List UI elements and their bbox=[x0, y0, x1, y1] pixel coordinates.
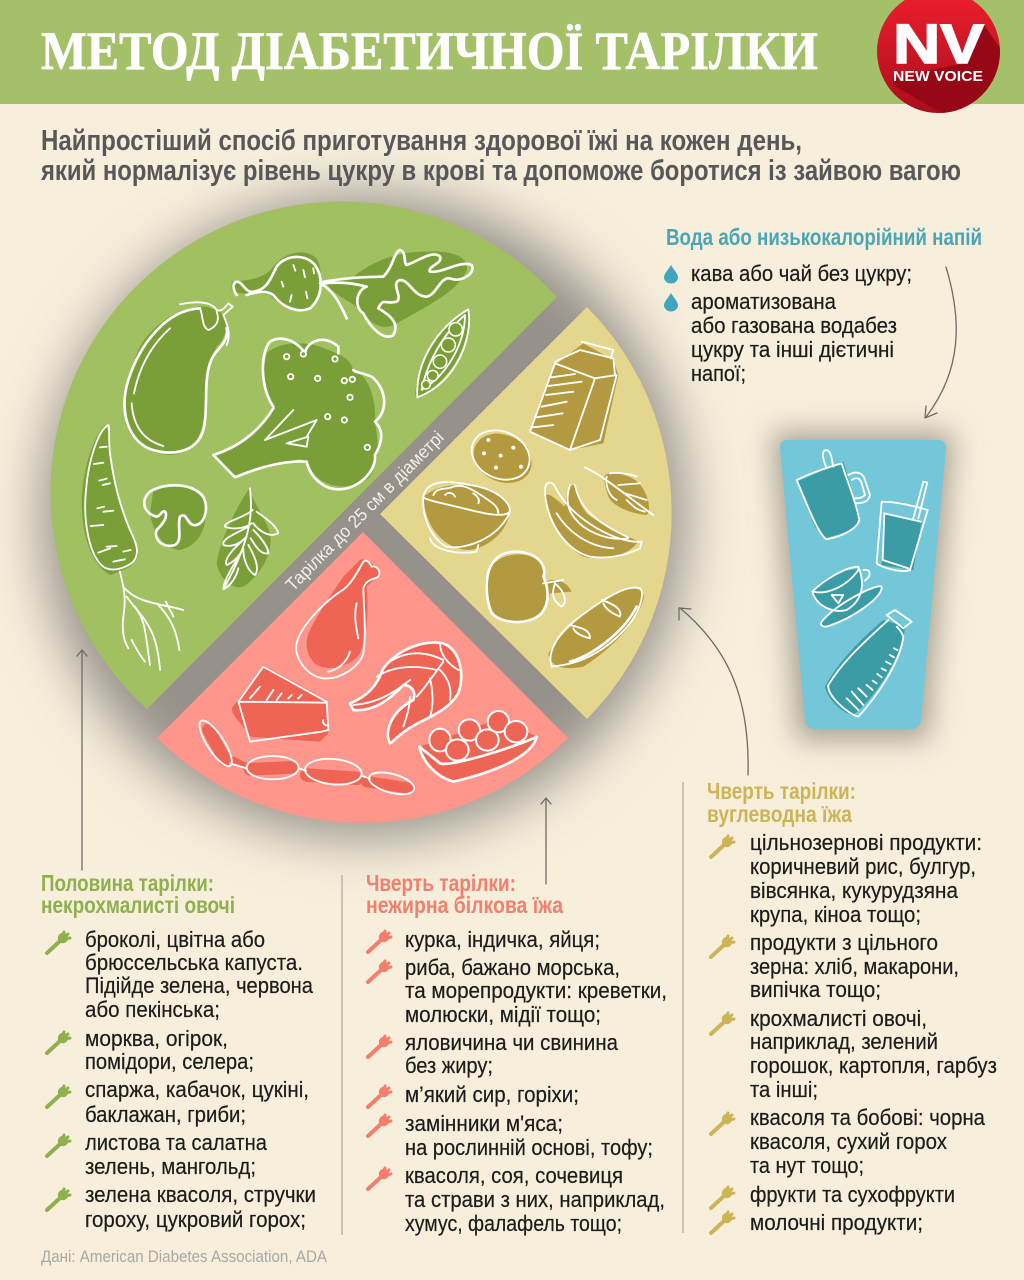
icon: beet leaf bbox=[320, 250, 473, 337]
heading: quarter plate carbs: Чверть тарілки: bbox=[707, 778, 856, 804]
icon: pea pod bbox=[415, 309, 469, 397]
divider left bbox=[341, 875, 343, 1235]
icon: eggplant bbox=[125, 302, 233, 455]
list item: meat substitutes bbox=[368, 1111, 653, 1160]
panel: water or low-calorie drink bbox=[664, 224, 982, 386]
list item: legumes bbox=[711, 1105, 986, 1178]
icon: leaf bbox=[217, 488, 278, 589]
heading: quarter plate protein bbox=[366, 870, 563, 918]
list item: green beans: зелена квасоля, стручки bbox=[85, 1182, 316, 1207]
glass with drinks bbox=[780, 440, 946, 729]
icon: bread loaf bbox=[548, 587, 644, 668]
list item: beans bbox=[368, 1163, 665, 1236]
panel: carbohydrates list bbox=[707, 778, 997, 1235]
list item: beans: квасоля, соя, сочевиця bbox=[405, 1163, 623, 1188]
logo: NV New Voice bbox=[877, 0, 1005, 118]
heading: quarter plate carbs bbox=[707, 778, 856, 827]
arrow: carbs label to plate bbox=[679, 608, 748, 775]
heading: quarter plate protein: нежирна білкова їжа bbox=[366, 892, 563, 918]
list item: broccoli: брюссельська капуста. bbox=[85, 950, 303, 975]
plate: quarter, carbohydrates bbox=[380, 307, 672, 719]
list item: beef bbox=[368, 1030, 619, 1078]
list item: asparagus: спаржа, кабачок, цукіні, bbox=[85, 1077, 309, 1102]
icon: potato bbox=[464, 421, 540, 492]
icon: teacup bbox=[812, 567, 882, 627]
panel: protein list bbox=[366, 870, 667, 1236]
logo: NV New Voice: NV bbox=[893, 12, 984, 75]
list item: poultry: курка, індичка, яйця; bbox=[405, 927, 600, 952]
icon: mushroom bbox=[144, 485, 206, 550]
list item: meat substitutes: замінники м'яса; bbox=[405, 1111, 563, 1136]
icon: water bottle bbox=[825, 610, 912, 717]
icon: grain bowl bbox=[423, 482, 510, 553]
list item: whole grain products: продукти з цільного bbox=[750, 930, 938, 955]
list item: whole grain products: зерна: хліб, макарони, bbox=[750, 954, 959, 979]
list item: flavoured water: або газована водабез bbox=[691, 313, 897, 338]
list item: carrot bbox=[47, 1026, 254, 1074]
arrow: drinks to glass bbox=[925, 267, 956, 418]
list item: fish: риба, бажано морська, bbox=[405, 955, 620, 980]
title: МЕТОД ДІАБЕТИЧНОЇ ТАРІЛКИ bbox=[41, 21, 818, 81]
plate shadow bbox=[42, 194, 686, 838]
list item: fruit: фрукти та сухофрукти bbox=[750, 1182, 955, 1207]
icon: broccoli bbox=[213, 339, 384, 489]
list item: fish bbox=[368, 955, 667, 1027]
list item: flavoured water bbox=[664, 289, 897, 386]
list item: legumes: квасоля, сухий горох bbox=[750, 1129, 947, 1154]
list item: leafy greens bbox=[47, 1130, 268, 1179]
list item: fish: молюски, мідії тощо; bbox=[405, 1002, 601, 1027]
plate: quarter, lean protein bbox=[157, 532, 568, 823]
list item: carrot: морква, огірок, bbox=[85, 1026, 228, 1051]
list item: leafy greens: зелень, мангольд; bbox=[85, 1154, 256, 1179]
subtitle bbox=[40, 125, 961, 187]
list item: flavoured water: ароматизована bbox=[691, 289, 837, 314]
list item: beans: хумус, фалафель тощо; bbox=[405, 1211, 622, 1236]
list item: asparagus bbox=[47, 1077, 309, 1127]
arrow: protein label to plate bbox=[541, 798, 551, 884]
icon: salmon steak bbox=[350, 643, 461, 743]
logo: NV New Voice: NEW VOICE bbox=[893, 68, 983, 85]
list item: broccoli bbox=[47, 927, 314, 1022]
subtitle: Найпростіший спосіб приготування здорової їжі на кожен день, bbox=[41, 125, 802, 157]
icon: carrot bbox=[82, 425, 183, 670]
list item: whole grains: вівсянка, кукурудзяна bbox=[750, 878, 959, 903]
icon: sausages bbox=[194, 716, 417, 798]
list item: flavoured water: напої; bbox=[691, 361, 746, 386]
icon: bananas bbox=[545, 483, 642, 559]
list item: legumes: та нут тощо; bbox=[750, 1153, 864, 1178]
list item: green beans bbox=[47, 1182, 316, 1232]
list item: carrot: помідори, селера; bbox=[85, 1049, 254, 1074]
list item: starchy vegetables: горошок, картопля, гарбуз bbox=[750, 1053, 997, 1078]
icon: wheat leaf bbox=[585, 468, 653, 515]
divider right bbox=[682, 782, 684, 1233]
icon: cheese bbox=[232, 665, 328, 742]
list item: broccoli: броколі, цвітна або bbox=[85, 927, 265, 952]
list item: starchy vegetables bbox=[711, 1006, 997, 1102]
list item: whole grains: коричневий рис, булгур, bbox=[750, 854, 976, 879]
list item: broccoli: Підійде зелена, червона bbox=[85, 973, 314, 998]
list item: beef: яловичина чи свинина bbox=[405, 1030, 619, 1055]
heading: quarter plate protein: Чверть тарілки: bbox=[366, 870, 516, 896]
list item: soft cheese: м’який сир, горіхи; bbox=[405, 1082, 579, 1107]
panel: vegetables list bbox=[41, 870, 316, 1232]
list item: broccoli: або пекінська; bbox=[85, 997, 220, 1022]
list item: whole grain products: випічка тощо; bbox=[750, 977, 881, 1002]
heading: half plate: некрохмалисті овочі bbox=[41, 892, 235, 918]
plate: half, non-starchy vegetables bbox=[50, 202, 557, 709]
icon: milk carton bbox=[530, 342, 618, 450]
list item: green beans: гороху, цукровий горох; bbox=[85, 1207, 306, 1232]
list item: whole grains bbox=[711, 830, 982, 927]
heading: half plate bbox=[41, 870, 235, 918]
list item: coffee or tea: кава або чай без цукру; bbox=[691, 261, 912, 286]
list item: starchy vegetables: крохмалисті овочі, bbox=[750, 1006, 927, 1031]
list item: dairy: молочні продукти; bbox=[750, 1210, 923, 1235]
icon: drinking glass bbox=[877, 482, 928, 571]
heading: quarter plate carbs: вуглеводна їжа bbox=[707, 801, 852, 827]
header band bbox=[0, 0, 1024, 104]
source: Дані: American Diabetes Association, ADA bbox=[41, 1247, 328, 1266]
plate diameter label: Тарілка до 25 см в діаметрі bbox=[282, 427, 448, 595]
list item: leafy greens: листова та салатна bbox=[85, 1130, 268, 1155]
list item: whole grain products bbox=[711, 930, 959, 1002]
icon: mug bbox=[797, 450, 870, 539]
list item: starchy vegetables: та інші; bbox=[750, 1077, 818, 1102]
list item: whole grains: крупа, кіноа тощо; bbox=[750, 902, 921, 927]
icon: chicken leg bbox=[296, 559, 380, 678]
list item: beans: та страви з них, наприклад, bbox=[405, 1187, 665, 1212]
list item: starchy vegetables: наприклад, зелений bbox=[750, 1029, 938, 1054]
list item: meat substitutes: на рослинній основі, тофу; bbox=[405, 1135, 653, 1160]
heading: half plate: Половина тарілки: bbox=[41, 870, 214, 896]
list item: flavoured water: цукру та інші дієтичні bbox=[691, 337, 894, 362]
list item: fish: та морепродукти: креветки, bbox=[405, 978, 667, 1003]
list item: legumes: квасоля та бобові: чорна bbox=[750, 1105, 986, 1130]
icon: beet bbox=[232, 252, 321, 311]
arrow: vegetables label to plate bbox=[77, 650, 87, 870]
icon: tray with strawberries bbox=[419, 711, 537, 782]
list item: asparagus: баклажан, гриби; bbox=[85, 1102, 246, 1127]
list item: whole grains: цільнозернові продукти: bbox=[750, 830, 982, 855]
icon: apple bbox=[485, 552, 572, 623]
list item: beef: без жиру; bbox=[405, 1053, 493, 1078]
glass shadow bbox=[772, 432, 954, 740]
